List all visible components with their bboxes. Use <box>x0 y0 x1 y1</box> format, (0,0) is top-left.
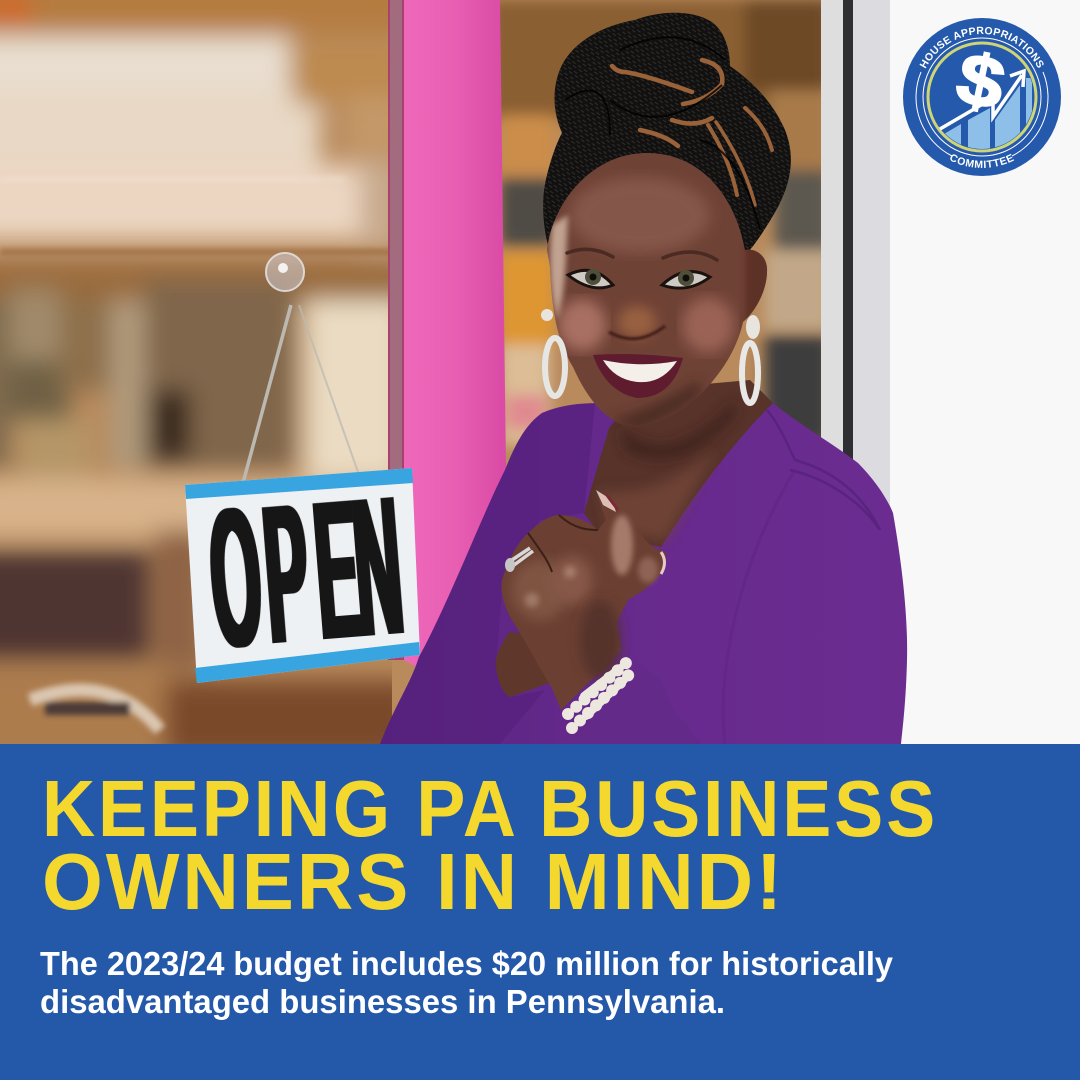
white door jamb <box>821 0 1080 744</box>
yellow ring <box>928 43 1036 151</box>
eyebrows <box>567 249 717 260</box>
smile <box>593 354 683 398</box>
title: OWNERS IN MIND! <box>42 837 785 926</box>
sweater cuff <box>555 663 702 744</box>
sign card <box>185 468 420 683</box>
subtitle: The 2023/24 budget includes $20 million for historically <box>40 945 894 982</box>
clasped hands <box>501 490 666 710</box>
suction cup <box>265 252 305 292</box>
logo text <box>920 26 1044 168</box>
dollar sign: $ <box>950 38 1011 126</box>
neck and chest <box>584 380 773 547</box>
logo text: COMMITTEE <box>950 154 1014 168</box>
woman <box>380 13 907 744</box>
photo: shop owner in doorway <box>0 0 908 744</box>
face <box>540 150 770 430</box>
title <box>42 764 938 926</box>
blurred interior behind the woman <box>490 0 830 445</box>
bottom blue band <box>0 744 1080 1080</box>
purple sweater <box>380 400 907 744</box>
ring <box>505 548 533 572</box>
logo text: HOUSE APPROPRIATIONS <box>920 26 1044 68</box>
chart bars <box>945 78 1032 149</box>
blurred shop window background <box>0 0 415 765</box>
subtitle <box>40 945 894 1020</box>
title: KEEPING PA BUSINESS <box>42 764 938 853</box>
open sign <box>185 252 420 691</box>
forearm behind hand <box>496 632 549 697</box>
growth arrow <box>940 71 1024 129</box>
subtitle: disadvantaged businesses in Pennsylvania. <box>40 983 725 1020</box>
thin white rings <box>916 38 1048 156</box>
hair <box>543 13 791 257</box>
logo: House Appropriations Committee <box>903 18 1061 176</box>
eyes <box>568 269 710 288</box>
hanging chains <box>243 305 358 483</box>
right earring <box>742 315 760 403</box>
pink door frame <box>388 0 506 680</box>
pearl bracelet <box>568 656 636 728</box>
left earring <box>541 309 565 396</box>
sign lettering: OPEN <box>203 455 409 691</box>
